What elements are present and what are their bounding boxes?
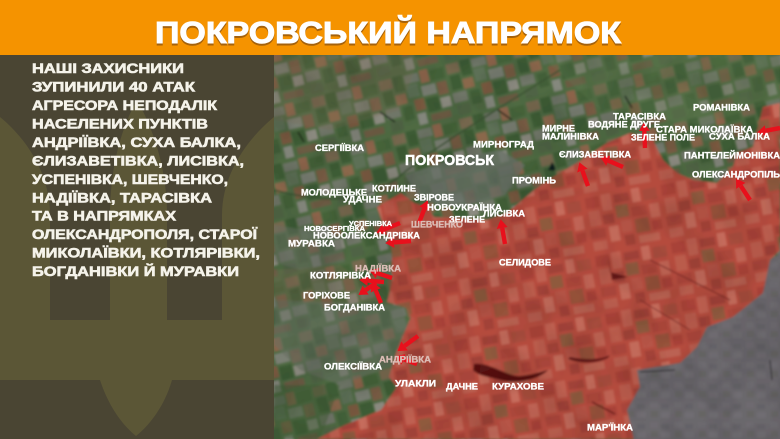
map labels: settlements: МИРНОГРАД bbox=[473, 140, 534, 150]
map labels: settlements: МИРНЕ bbox=[542, 124, 575, 134]
text block: summary: БОГДАНІВКИ Й МУРАВКИ bbox=[32, 264, 239, 279]
map labels: settlements: УДАЧНЕ bbox=[343, 194, 382, 206]
left panel bbox=[0, 55, 274, 439]
map labels: faded settlements: АНДРІЇВКА bbox=[379, 354, 431, 366]
map labels: settlements: ЗЕЛЕНЕ bbox=[449, 214, 485, 226]
Road and ravines bbox=[274, 70, 560, 199]
map labels: settlements: УСПЕНІВКА bbox=[349, 219, 393, 228]
map labels: settlements: ЗЕЛЕНЕ ПОЛЕ bbox=[631, 132, 695, 144]
map labels: faded settlements bbox=[355, 220, 463, 366]
map labels: settlements: ТАРАСІВКА bbox=[613, 112, 666, 122]
text block: summary: ЄЛИЗАВЕТІВКА, ЛИСІВКА, bbox=[32, 153, 244, 168]
map labels: settlements: СТАРА МИКОЛАЇВКА bbox=[656, 124, 753, 136]
map labels: settlements: КОТЛИНЕ bbox=[372, 184, 416, 194]
map labels: settlements: КУРАХОВЕ bbox=[492, 382, 544, 392]
text block: summary: АГРЕСОРА НЕПОДАЛІК bbox=[32, 98, 218, 113]
Kurakhove reservoir bbox=[473, 364, 548, 382]
map labels: settlements: КОТЛЯРІВКА bbox=[310, 270, 371, 282]
map labels: settlements: СЕЛИДОВЕ bbox=[499, 258, 551, 268]
map labels: settlements: НОВООЛЕКСАНДРІВКА bbox=[313, 230, 420, 242]
map labels: settlements: СЕРГІЇВКА bbox=[315, 143, 364, 154]
text block: summary bbox=[32, 61, 260, 279]
icon: trident watermark bbox=[0, 100, 274, 436]
map labels: settlements: БОГДАНІВКА bbox=[324, 302, 385, 314]
text block: summary: МИКОЛАЇВКИ, КОТЛЯРІВКИ, bbox=[32, 246, 260, 261]
title: ПОКРОВСЬКИЙ НАПРЯМОК bbox=[155, 16, 621, 52]
text block: summary: НАШІ ЗАХИСНИКИ bbox=[32, 61, 184, 76]
map labels: settlements: ПАНТЕЛЕЙМОНІВКА bbox=[684, 150, 780, 162]
Grey urban area bbox=[627, 250, 780, 439]
map labels: settlements: СУХА БАЛКА bbox=[709, 132, 770, 142]
map labels: settlements: ПРОМІНЬ bbox=[512, 176, 556, 186]
map labels: settlements: ОЛЕКСІЇВКА bbox=[324, 362, 382, 372]
text block: summary: УСПЕНІВКА, ШЕВЧЕНКО, bbox=[32, 172, 228, 187]
text block: summary: ОЛЕКСАНДРОПОЛЯ, СТАРОЇ bbox=[32, 227, 258, 242]
map labels: settlements bbox=[288, 102, 780, 434]
map labels: settlements: ВОДЯНЕ ДРУГЕ bbox=[588, 120, 660, 130]
map bbox=[270, 50, 780, 439]
map labels: settlements: ГОРІХОВЕ bbox=[303, 290, 350, 302]
map labels: settlements: ДАЧНЕ bbox=[446, 382, 478, 392]
map labels: settlements: ЛИСІВКА bbox=[483, 208, 525, 220]
map labels: settlements: ЄЛИЗАВЕТІВКА bbox=[559, 150, 631, 160]
text block: summary: НАСЕЛЕНИХ ПУНКТІВ bbox=[32, 116, 208, 131]
map labels: settlements: ЗВІРОВЕ bbox=[414, 192, 454, 204]
title: ПОКРОВСЬКИЙ НАПРЯМОК bbox=[155, 14, 621, 50]
map labels: settlements: МОЛОДЕЦЬКЕ bbox=[301, 188, 367, 198]
Western and southern grey-green terrain bbox=[274, 225, 345, 270]
map labels: faded settlements: ШЕВЧЕНКО bbox=[411, 220, 463, 230]
map labels: settlements: МАЛИНІВКА bbox=[542, 132, 599, 142]
Occupied territory bbox=[317, 103, 780, 439]
text block: summary: АНДРІЇВКА, СУХА БАЛКА, bbox=[32, 135, 241, 150]
map labels: settlements: МАР'ЇНКА bbox=[587, 422, 633, 434]
map labels: settlements: УЛАКЛИ bbox=[395, 378, 436, 390]
map labels: settlements: НОВОСЕРГІВКА bbox=[304, 224, 366, 233]
map labels: settlements: МУРАВКА bbox=[288, 238, 335, 250]
map labels: settlements: НОВОУКРАЇНКА bbox=[427, 202, 502, 214]
map labels: settlements: ПОКРОВСЬК bbox=[405, 153, 494, 169]
text block: summary: ЗУПИНИЛИ 40 АТАК bbox=[32, 80, 196, 94]
header bar bbox=[0, 0, 780, 55]
map labels: settlements: РОМАНІВКА bbox=[693, 102, 750, 114]
text block: summary: ТА В НАПРЯМКАХ bbox=[32, 209, 176, 224]
map labels: settlements: ОЛЕКСАНДРОПІЛЬ bbox=[692, 170, 780, 180]
Pokrovsk town area bbox=[405, 150, 525, 208]
text block: summary: НАДІЇВКА, ТАРАСІВКА bbox=[32, 190, 212, 205]
map labels: faded settlements: НАДІЇВКА bbox=[355, 264, 401, 274]
Farmland tint variation bbox=[274, 55, 420, 130]
attack arrows bbox=[366, 128, 780, 364]
